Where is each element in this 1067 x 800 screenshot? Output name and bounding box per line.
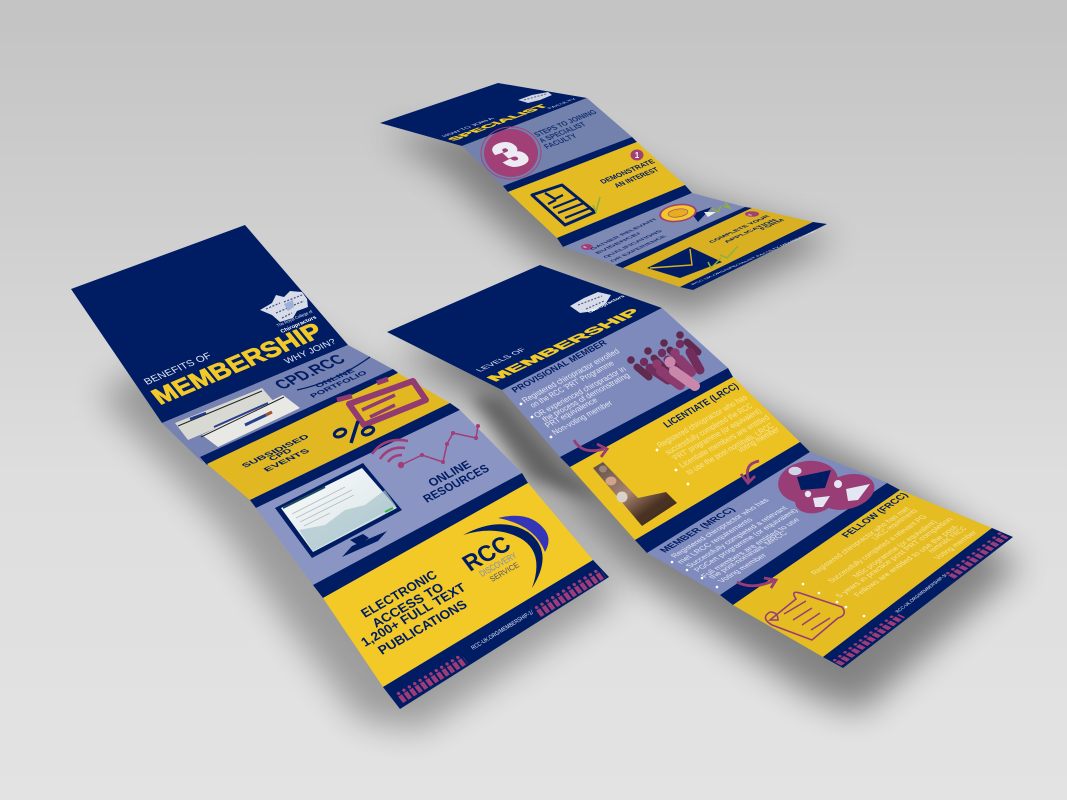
icon: envelope <box>647 247 722 278</box>
panel: CPD periwinkle <box>162 345 398 462</box>
text: fellow: Successfully completed a relevant PG <box>826 514 929 584</box>
text: footer url: RCC-UK.ORG/MEMBERSHIP-1/ <box>471 610 535 652</box>
icon: document <box>532 185 595 225</box>
text: provisional member: the process of demonstrating <box>539 371 632 423</box>
icon: step three badge: 3 <box>746 214 754 216</box>
heading: benefits of membership: MEMBERSHIP <box>147 319 328 410</box>
icon: footer people right row <box>946 533 1005 577</box>
text: gather relevant evidence <box>589 218 669 263</box>
icon: wifi and line chart <box>372 424 480 468</box>
leaflet: benefits of membership <box>71 225 609 709</box>
leaflet: how to join a specialist faculty <box>380 83 827 290</box>
text: online resources: RESOURCES <box>420 462 492 505</box>
icon: RCC discovery service logo: SERVICE <box>488 561 521 584</box>
icon: rosette medal <box>658 201 716 225</box>
panel: electronic access yellow <box>323 483 593 687</box>
text: licentiate: LICENTIATE (LRCC) <box>662 382 741 430</box>
text: provisional member <box>509 338 632 438</box>
text: provisional member: OR experienced chiropractor in <box>531 364 628 419</box>
heading: how to join a specialist faculty: HOW TO JOIN A <box>441 118 497 137</box>
text: steps to joining: A SPECIALIST <box>537 121 588 144</box>
icon: footer people left row <box>833 613 902 664</box>
text: footer url: RCC-UK.ORG/SPECIALIST-FACULTY-MEMBERSHIP/ <box>690 230 818 285</box>
icon: crest <box>518 92 552 103</box>
text: fellow <box>802 492 979 617</box>
panel: stripe three <box>313 473 528 598</box>
heading: levels of membership: MEMBERSHIP <box>484 307 646 384</box>
text: licentiate: successfully completed the RCC <box>663 401 755 456</box>
text: licentiate: Registered chiropractor who has <box>655 393 749 449</box>
shadows <box>100 130 1020 730</box>
text: fellow: Fellows are entitled to use the post- <box>852 523 962 598</box>
text: complete your application form: APPLICATION <box>723 219 779 244</box>
text: fellow: FELLOW (FRCC) <box>840 492 911 539</box>
text: steps to joining: STEPS TO JOINING <box>532 108 599 138</box>
panel: navy cover <box>387 265 662 390</box>
text: fellow: LRCC requirements <box>870 508 920 541</box>
text: gather relevant evidence: QUALIFICATIONS <box>602 230 665 259</box>
text: licentiate: Licentiate members are entitled <box>677 413 771 469</box>
text: complete your application form <box>708 215 787 244</box>
heading: how to join a specialist faculty: FACULTY <box>546 98 580 109</box>
text: provisional member: Non-voting member <box>549 398 615 436</box>
icon: crest and college name <box>570 292 627 314</box>
icon: footer people left row <box>397 655 466 700</box>
icon: step one badge: 1 <box>635 151 640 160</box>
icon: step three badge <box>745 211 759 217</box>
text: licentiate: 'PRT' programme (or equivalent) <box>670 406 763 462</box>
text: subsidised CPD events <box>239 433 312 473</box>
icon: step two badge <box>581 244 593 250</box>
text: fellow: 5 years in practice post PRT completion <box>834 516 955 599</box>
arrow: licentiate to member <box>741 461 759 483</box>
text: member: Successfully completed a relevant <box>684 505 790 569</box>
text: fellow: Registered chiropractor who has met <box>809 505 912 576</box>
panel: stripe one <box>200 369 398 465</box>
icon: monitor <box>275 463 402 558</box>
text: online resources: ONLINE <box>425 458 474 489</box>
text: footer url: RCC-UK.ORG/MEMBERSHIP-3/ <box>894 573 949 614</box>
heading: how to join a specialist faculty: SPECIALIST <box>445 104 552 142</box>
text: fellow: Voting member <box>932 529 979 561</box>
panel: online resources periwinkle <box>256 410 522 585</box>
icon: calendar <box>337 379 426 425</box>
icon: crowd of people <box>627 331 700 386</box>
text: member: MEMBER (MRCC) <box>658 506 738 554</box>
text: gather relevant evidence: OR EXPERIENCE <box>609 235 669 263</box>
panel: provisional member <box>502 308 728 457</box>
text: provisional member: PRT equivalence <box>542 395 600 429</box>
panel: stripe three <box>720 483 900 605</box>
icon: step two badge: 2 <box>581 246 589 248</box>
text: member: met LRCC requirements <box>675 517 755 565</box>
panel: navy cover <box>71 225 348 423</box>
text: subsidised CPD events: SUBSIDISED <box>239 433 311 469</box>
heading: levels of membership: LEVELS OF <box>474 347 529 373</box>
panel: footer <box>383 560 609 709</box>
icon: green ticks <box>711 203 730 212</box>
panel: demonstrate an interest <box>508 142 685 238</box>
text: member: Full members are entitled to use <box>699 516 802 579</box>
text: complete your application form: FORM <box>759 219 787 231</box>
panel: application form <box>623 208 813 287</box>
icon: step one badge <box>630 150 644 160</box>
icon: crest and college name <box>260 291 318 335</box>
panel: stripe one <box>560 368 733 467</box>
icon: RCC discovery service logo: RCC <box>457 531 516 577</box>
heading: benefits of membership: BENEFITS OF <box>142 351 214 387</box>
text: member: Registered chiropractor who has <box>669 497 771 559</box>
arrow: provisional to licentiate <box>574 440 607 457</box>
icon: crest and college name: Chiropractors <box>279 315 318 335</box>
icon: percent sign <box>333 421 375 443</box>
text: demonstrate an interest: DEMONSTRATE <box>598 158 657 185</box>
panel: licentiate <box>570 377 800 540</box>
text: member: PGCert programme (or equivalent) <box>692 507 800 573</box>
text: steps to joining <box>532 108 599 150</box>
text: complete your application form: COMPLETE YOUR <box>708 215 773 244</box>
text: provisional member: PROVISIONAL MEMBER <box>509 338 609 394</box>
text: CPD.RCC online portfolio: CPD.RCC <box>270 352 350 392</box>
text: gather relevant evidence: EVIDENCE/ <box>594 232 644 255</box>
text: demonstrate an interest: AN INTEREST <box>612 166 661 189</box>
text: member <box>658 497 802 588</box>
arrow: member to fellow <box>737 578 776 588</box>
panel: member <box>647 452 888 595</box>
text: electronic access: ELECTRONIC <box>358 567 440 620</box>
heading: levels of membership <box>474 307 646 384</box>
leaflet: levels of membership <box>387 265 1013 668</box>
text: fellow: MSc programme (or equivalent) <box>851 519 939 579</box>
panel: gather evidence <box>563 193 745 265</box>
panel: three steps <box>462 98 632 186</box>
text: electronic access: 1,200+ FULL TEXT <box>358 580 469 649</box>
icon: scroll <box>765 592 844 640</box>
icon: green tick <box>593 197 600 212</box>
icon: crest and college name: Chiropractors <box>586 295 627 314</box>
text: fellow: nominals, FRCC <box>926 525 969 554</box>
panel: stripe three <box>615 207 752 268</box>
icon: number three badge: 3 <box>482 134 539 174</box>
text: member: Voting member <box>716 552 769 584</box>
text: licentiate <box>655 382 782 485</box>
text: subsidised CPD events: EVENTS <box>261 447 312 473</box>
panel: stripe one <box>503 137 637 192</box>
panel: navy cover <box>380 83 587 146</box>
text: licentiate: Voting member <box>735 425 782 454</box>
icon: people in circles <box>775 457 878 517</box>
panel: stripe two <box>635 442 810 553</box>
icon: footer people right row <box>535 569 604 614</box>
panel: fellow <box>733 490 992 657</box>
text: gather relevant evidence: GATHER RELEVANT <box>589 218 661 251</box>
icon: green ticks <box>708 246 738 268</box>
text: provisional member: on the RCC 'PRT' Programme <box>527 359 616 409</box>
panel: stripe two <box>250 403 460 508</box>
photo: L-shaped group photo <box>593 462 677 526</box>
text: CPD.RCC online portfolio: PORTFOLIO <box>308 369 369 399</box>
text: steps to joining: FACULTY <box>542 132 580 150</box>
text: electronic access: ACCESS TO <box>369 580 447 630</box>
text: member: the post-nominals, MRCC <box>707 530 790 580</box>
panel: subsidised events yellow <box>207 373 450 500</box>
text: provisional member: Registered chiropractor enrolled <box>519 346 622 404</box>
icon: portfolio screenshots <box>175 388 300 447</box>
text: licentiate: to use the post-nominals, LRCC <box>684 421 776 476</box>
text: subsidised CPD events: CPD <box>266 447 294 462</box>
icon: crest and college name: The Royal College of <box>275 309 314 328</box>
icon: RCC discovery service logo <box>457 516 548 588</box>
heading: how to join a specialist faculty <box>441 98 580 142</box>
panel: stripe two <box>557 185 692 247</box>
icon: RCC discovery service logo: DISCOVERY <box>477 551 519 579</box>
text: CPD.RCC online portfolio: ONLINE <box>313 367 357 389</box>
panel: footer <box>680 222 827 290</box>
heading: benefits of membership: WHY JOIN? <box>282 337 338 366</box>
text: electronic access: PUBLICATIONS <box>375 597 470 657</box>
panel: footer <box>823 528 1013 668</box>
